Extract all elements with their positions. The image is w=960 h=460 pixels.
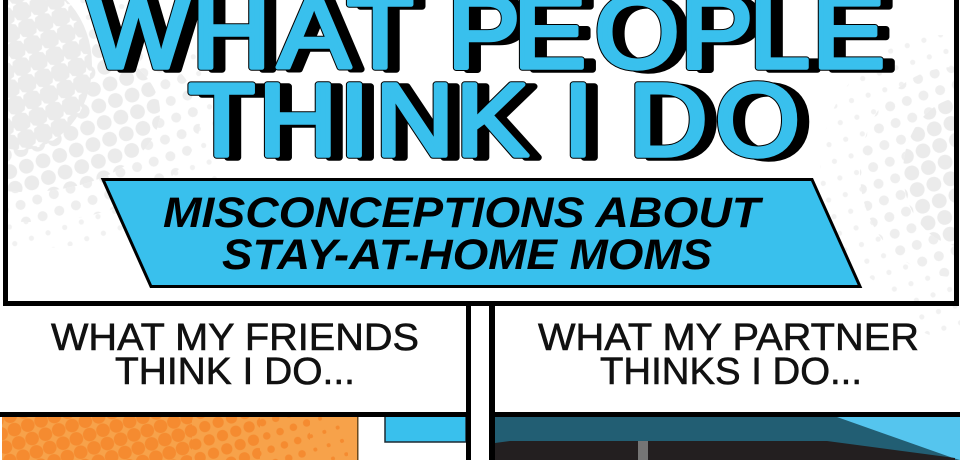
panel: partner — [495, 306, 960, 460]
title shadow: THINK I DO — [199, 65, 811, 180]
panel: title header — [0, 0, 960, 306]
subtitle text: MISCONCEPTIONS ABOUT — [163, 189, 764, 237]
title: THINK I DO — [188, 63, 800, 178]
dark room illustration — [495, 417, 960, 460]
partner heading: WHAT MY PARTNER — [538, 317, 919, 359]
partner heading — [538, 317, 919, 393]
subtitle text: STAY-AT-HOME MOMS — [222, 231, 712, 279]
friends heading: WHAT MY FRIENDS — [51, 317, 419, 359]
orange halftone illustration panel — [2, 416, 358, 460]
blue illustration block — [385, 416, 466, 442]
subtitle text — [163, 189, 764, 279]
title: THINK I DO — [188, 63, 800, 178]
halftone background left — [0, 0, 960, 305]
subtitle banner — [103, 180, 860, 286]
title shadow — [98, 0, 896, 180]
title — [87, 0, 885, 178]
friends heading: THINK I DO... — [115, 351, 355, 393]
partner heading: THINKS I DO... — [600, 351, 862, 393]
panel: friends — [0, 306, 466, 460]
friends heading — [51, 317, 419, 393]
